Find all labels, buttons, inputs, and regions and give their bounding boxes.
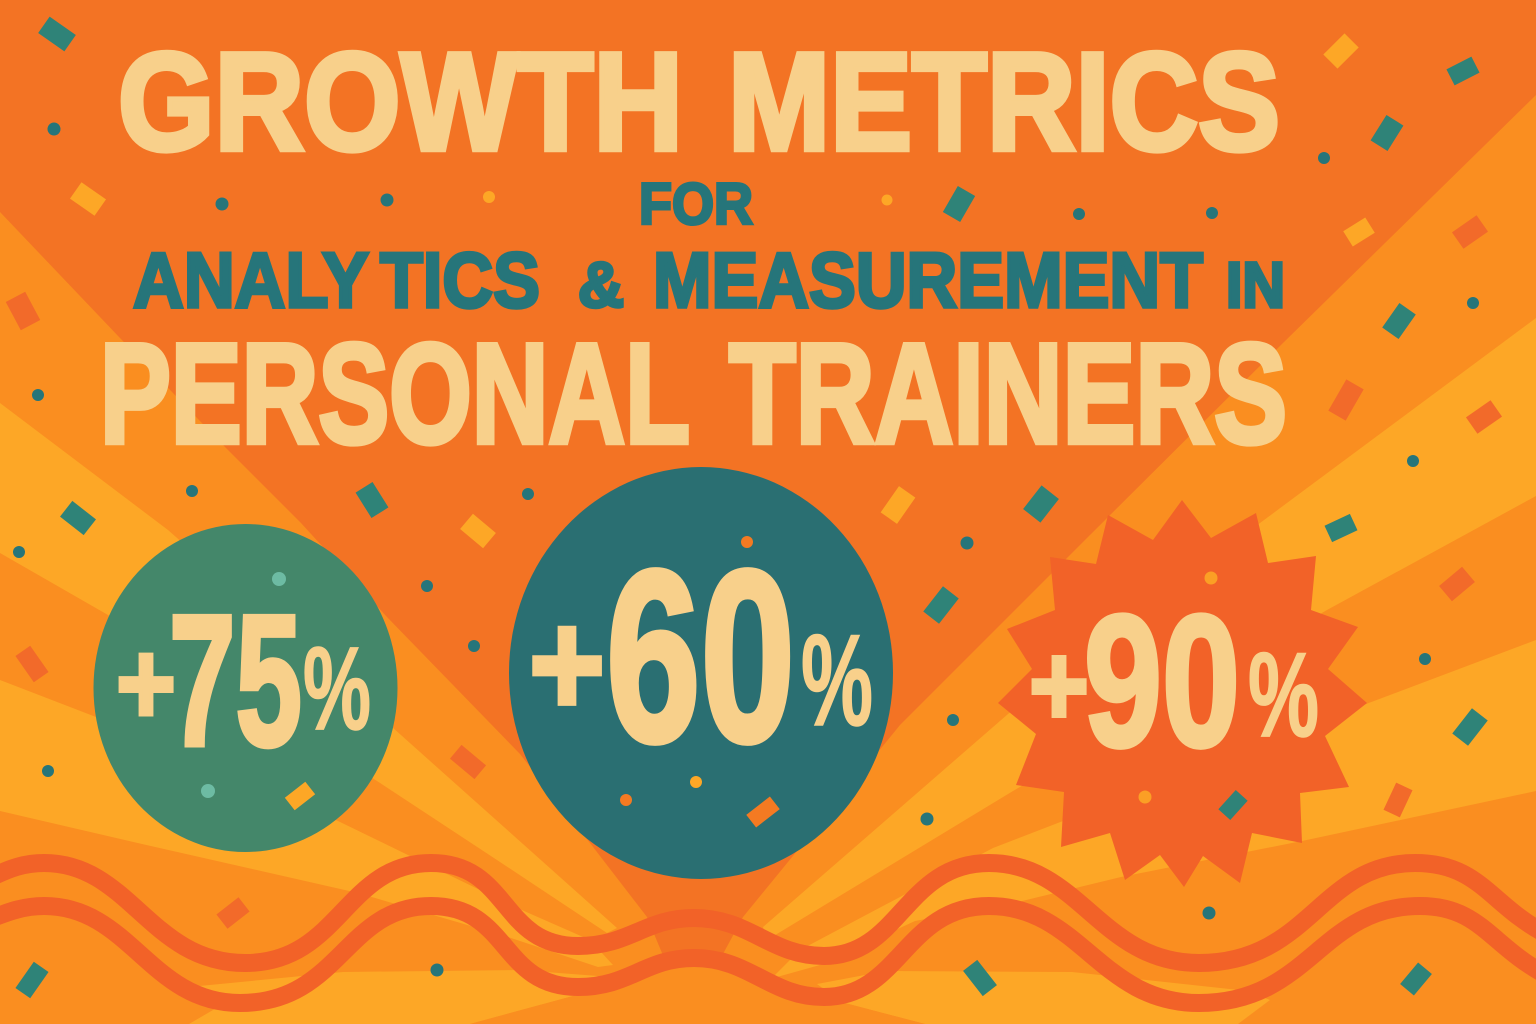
wave lines bbox=[0, 863, 1536, 1003]
metric badge: green circle +75% bbox=[94, 524, 398, 852]
heading line: growth metrics bbox=[118, 24, 1280, 180]
heading line: analytics and measurement in: MEASUREMENT bbox=[653, 236, 1203, 324]
heading line: growth metrics: GROWTH bbox=[118, 24, 683, 180]
heading line: personal trainers: TRAINERS bbox=[729, 314, 1287, 474]
metric badge: starburst +90%: % bbox=[1248, 628, 1319, 762]
metric badge: green circle +75%: 75 bbox=[169, 576, 302, 785]
confetti dots bbox=[13, 122, 1479, 976]
heading line: analytics and measurement in: ANALY bbox=[133, 236, 369, 324]
heading line: personal trainers bbox=[100, 314, 1287, 474]
heading line: growth metrics: METRICS bbox=[728, 24, 1280, 180]
metric badge: starburst +90%: 90 bbox=[1084, 576, 1240, 786]
metric badge: green circle +75%: + bbox=[116, 618, 176, 750]
metric badge: teal circle +60% bbox=[509, 467, 893, 879]
heading line: personal trainers: PERSONAL bbox=[100, 314, 690, 474]
heading line: analytics and measurement in: & bbox=[578, 249, 624, 321]
metric badge: teal circle +60%: 60 bbox=[606, 520, 795, 792]
metric badge: teal circle +60%: + bbox=[529, 582, 605, 747]
metric badge: teal circle +60%: % bbox=[801, 607, 873, 753]
title bbox=[100, 24, 1287, 474]
metric badge: green circle +75%: % bbox=[303, 623, 371, 755]
heading line: analytics and measurement in bbox=[133, 236, 1285, 324]
heading line: analytics and measurement in: TICS bbox=[380, 236, 540, 324]
metric badge: starburst +90% bbox=[998, 500, 1367, 887]
heading line: for: FOR bbox=[639, 172, 753, 237]
metric badge: starburst +90%: + bbox=[1029, 620, 1089, 750]
heading line: analytics and measurement in: IN bbox=[1226, 249, 1285, 321]
